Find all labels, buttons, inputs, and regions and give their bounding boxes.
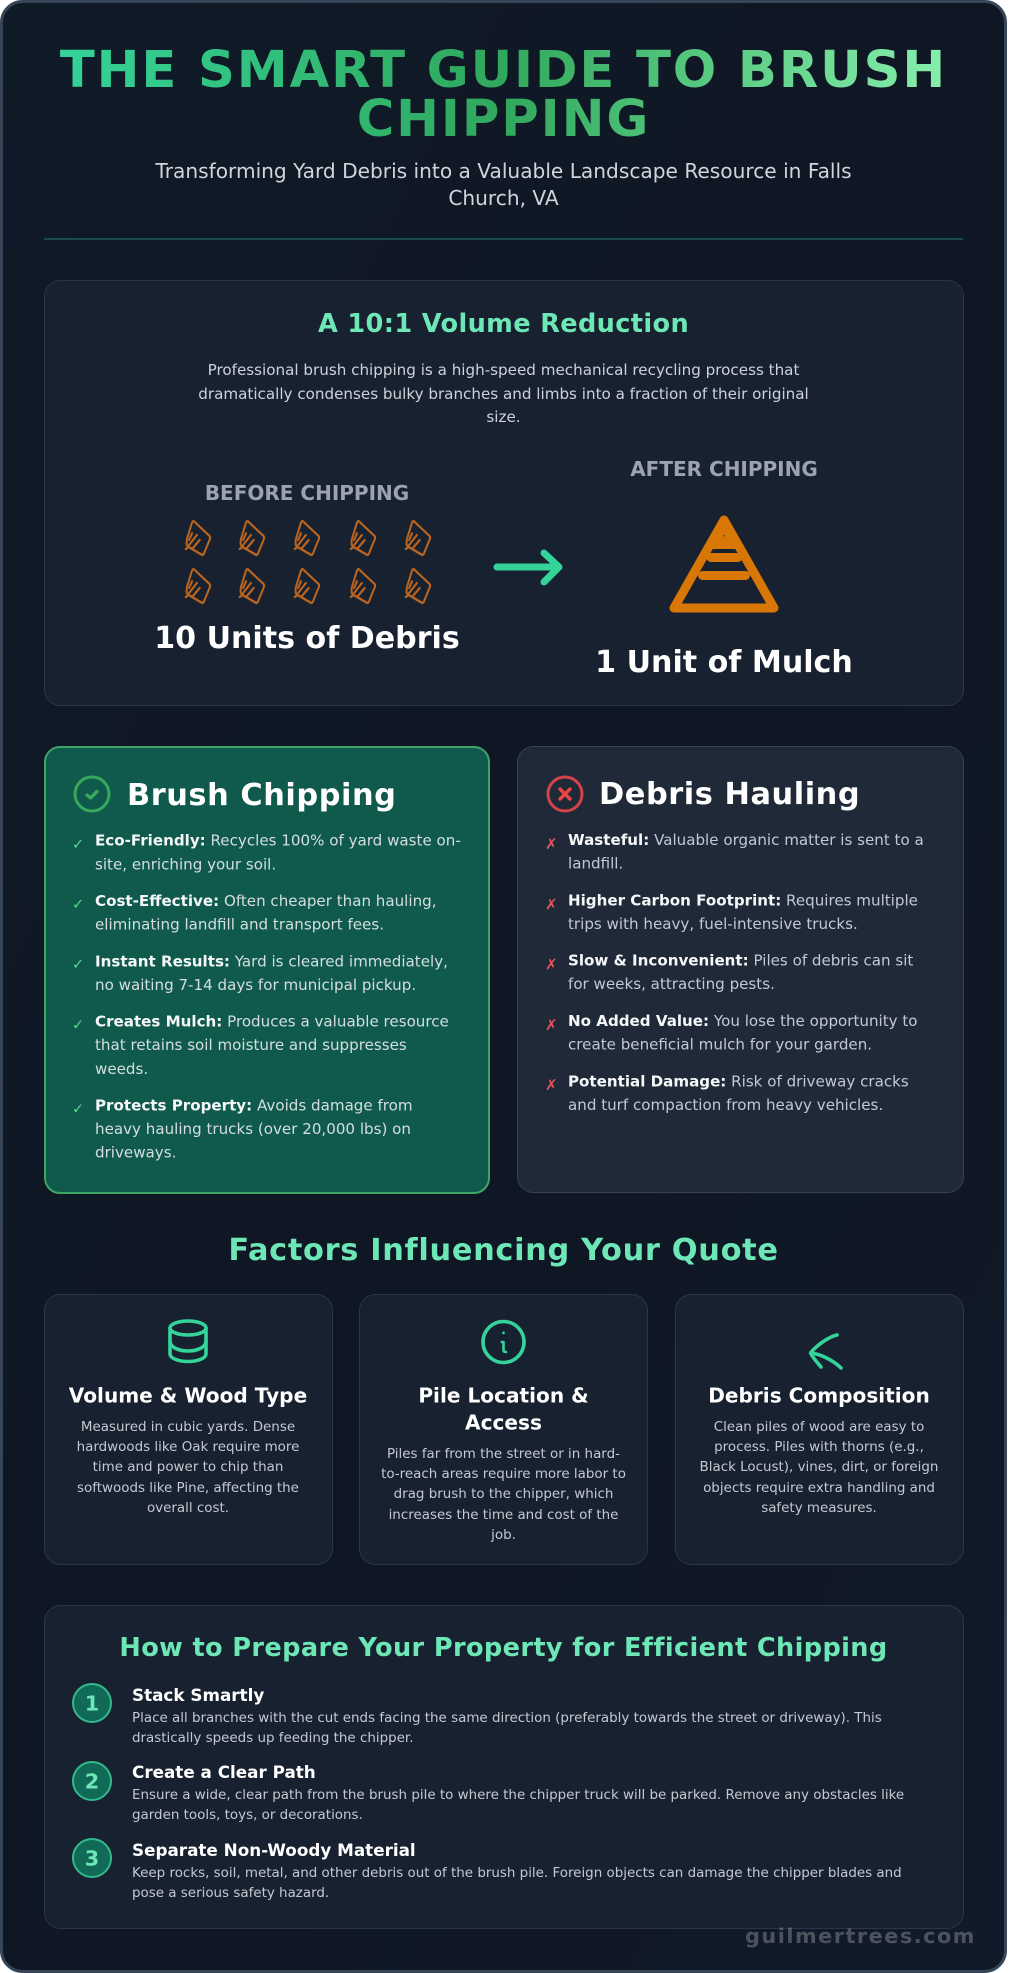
pros list: no waiting 7-14 days for municipal pickup. xyxy=(95,976,416,994)
pros list: ✓ xyxy=(72,837,84,853)
card: pile location xyxy=(360,1294,648,1564)
step 1 xyxy=(73,1684,882,1746)
step 1: Stack Smartly xyxy=(132,1685,264,1705)
cons list: ✗ xyxy=(545,956,558,974)
pros list: ✓ xyxy=(72,1102,84,1118)
step 2: Create a Clear Path xyxy=(132,1762,316,1782)
title xyxy=(60,40,947,149)
card text: to-reach areas require more labor to xyxy=(381,1467,626,1482)
pros list: Protects Property: Avoids damage from xyxy=(95,1096,413,1114)
icon: check circle xyxy=(75,777,109,811)
step 1: Place all branches with the cut ends facing the same direction (preferably towards the street or driveway). This xyxy=(132,1711,882,1726)
card text: drag brush to the chipper, which xyxy=(394,1487,613,1502)
header xyxy=(60,40,947,210)
after chipping label: AFTER CHIPPING xyxy=(630,457,818,481)
card text: increases the time and cost of the xyxy=(389,1508,618,1523)
card text: Piles far from the street or in hard- xyxy=(387,1447,620,1462)
icon: info circle xyxy=(483,1322,524,1362)
card text: process. Piles with thorns (e.g., xyxy=(714,1440,924,1455)
intro paragraph: size. xyxy=(486,408,521,426)
heading: brush chipping: Brush Chipping xyxy=(127,778,396,813)
pros list: ✓ xyxy=(72,957,84,973)
subtitle: Church, VA xyxy=(448,186,559,210)
card text: time and power to chip than xyxy=(93,1460,283,1475)
cons list: create beneficial mulch for your garden. xyxy=(568,1036,872,1054)
card title: Access xyxy=(465,1410,542,1434)
pros list xyxy=(72,832,461,1162)
pros list: ✓ xyxy=(72,1018,84,1034)
after value: 1 Unit of Mulch xyxy=(595,645,853,680)
before chipping label: BEFORE CHIPPING xyxy=(205,481,409,505)
card text: objects require extra handling and xyxy=(703,1481,935,1496)
watermark: guilmertrees.com xyxy=(745,1924,976,1948)
step 2: Ensure a wide, clear path from the brush pile to where the chipper truck will be parked. Remove any obstacles like xyxy=(132,1788,904,1803)
pros list: eliminating landfill and transport fees. xyxy=(95,916,384,934)
intro paragraph: Professional brush chipping is a high-speed mechanical recycling process that xyxy=(208,361,799,379)
cons list: ✗ xyxy=(545,895,558,913)
card text xyxy=(77,1420,299,1516)
intro paragraph: dramatically condenses bulky branches and limbs into a fraction of their original xyxy=(198,385,809,403)
step 1: drastically speeds up feeding the chipper. xyxy=(132,1731,414,1746)
cons list: Higher Carbon Footprint: Requires multiple xyxy=(568,891,918,909)
cons list: ✗ xyxy=(545,1076,558,1094)
icon: x circle xyxy=(548,777,582,811)
pros list: Instant Results: Yard is cleared immediately, xyxy=(95,952,448,970)
step 2: garden tools, toys, or decorations. xyxy=(132,1808,363,1823)
card title: Debris Composition xyxy=(708,1384,930,1408)
arrow xyxy=(497,553,559,582)
cons list: trips with heavy, fuel-intensive trucks. xyxy=(568,915,858,933)
icon: branch xyxy=(810,1335,841,1368)
pros list: that retains soil moisture and suppresses xyxy=(95,1036,407,1054)
panel: brush chipping xyxy=(45,747,489,1193)
heading: debris hauling: Debris Hauling xyxy=(599,777,860,812)
title: CHIPPING xyxy=(357,89,650,149)
heading: volume reduction: A 10:1 Volume Reduction xyxy=(318,309,689,339)
icon: database xyxy=(170,1321,206,1362)
cons list xyxy=(545,831,924,1114)
pros list: site, enriching your soil. xyxy=(95,855,276,873)
card title: Volume & Wood Type xyxy=(69,1384,307,1408)
card text: Black Locust), vines, dirt, or foreign xyxy=(700,1460,938,1475)
before value: 10 Units of Debris xyxy=(154,621,460,656)
card text: safety measures. xyxy=(761,1501,877,1516)
pros list: ✓ xyxy=(72,897,84,913)
pros list: weeds. xyxy=(95,1060,148,1078)
cons list: Slow & Inconvenient: Piles of debris can sit xyxy=(568,952,913,970)
cons list: and turf compaction from heavy vehicles. xyxy=(568,1096,883,1114)
step 2 xyxy=(73,1762,904,1823)
card text: softwoods like Pine, affecting the xyxy=(77,1481,299,1496)
cons list: landfill. xyxy=(568,855,623,873)
intro paragraph xyxy=(198,361,809,426)
subtitle: Transforming Yard Debris into a Valuable Landscape Resource in Falls xyxy=(154,159,852,183)
card text: hardwoods like Oak require more xyxy=(77,1440,299,1455)
pros list: driveways. xyxy=(95,1144,176,1162)
step 2: 2 xyxy=(85,1770,99,1794)
heading: factors: Factors Influencing Your Quote xyxy=(228,1233,779,1268)
panel: debris hauling xyxy=(518,746,964,1192)
cons list: for weeks, attracting pests. xyxy=(568,975,775,993)
title: THE SMART GUIDE TO BRUSH xyxy=(60,40,947,100)
icons: ten debris leaves xyxy=(186,521,430,603)
card text xyxy=(700,1420,938,1516)
card: debris composition xyxy=(676,1294,964,1564)
heading: prepare: How to Prepare Your Property for Efficient Chipping xyxy=(119,1633,888,1663)
card title xyxy=(418,1384,589,1434)
card text: Clean piles of wood are easy to xyxy=(714,1420,924,1435)
card: volume and wood type xyxy=(44,1294,332,1564)
icon: mulch pile xyxy=(674,520,774,608)
cons list: Potential Damage: Risk of driveway cracks xyxy=(568,1072,909,1090)
panel: volume reduction xyxy=(44,280,964,706)
cons list: ✗ xyxy=(545,1016,558,1034)
card title: Pile Location & xyxy=(418,1384,589,1408)
step 3 xyxy=(73,1839,902,1901)
pros list: Cost-Effective: Often cheaper than hauling, xyxy=(95,892,437,910)
card text xyxy=(381,1447,626,1543)
card text: job. xyxy=(490,1528,516,1543)
cons list: Wasteful: Valuable organic matter is sent to a xyxy=(568,831,924,849)
pros list: Eco-Friendly: Recycles 100% of yard waste on- xyxy=(95,832,461,850)
pros list: Creates Mulch: Produces a valuable resource xyxy=(95,1013,449,1031)
cons list: No Added Value: You lose the opportunity to xyxy=(568,1012,918,1030)
step 3: Keep rocks, soil, metal, and other debris out of the brush pile. Foreign objects can damage the chipper blades and xyxy=(132,1866,902,1881)
subtitle xyxy=(154,159,852,210)
step 3: pose a serious safety hazard. xyxy=(132,1886,329,1901)
step 1: 1 xyxy=(85,1692,99,1716)
step 3: 3 xyxy=(85,1846,99,1870)
card text: overall cost. xyxy=(147,1501,229,1516)
cons list: ✗ xyxy=(545,835,558,853)
pros list: heavy hauling trucks (over 20,000 lbs) on xyxy=(95,1120,411,1138)
step 3: Separate Non-Woody Material xyxy=(132,1840,416,1860)
panel: preparation steps xyxy=(44,1606,964,1928)
card text: Measured in cubic yards. Dense xyxy=(81,1420,295,1435)
